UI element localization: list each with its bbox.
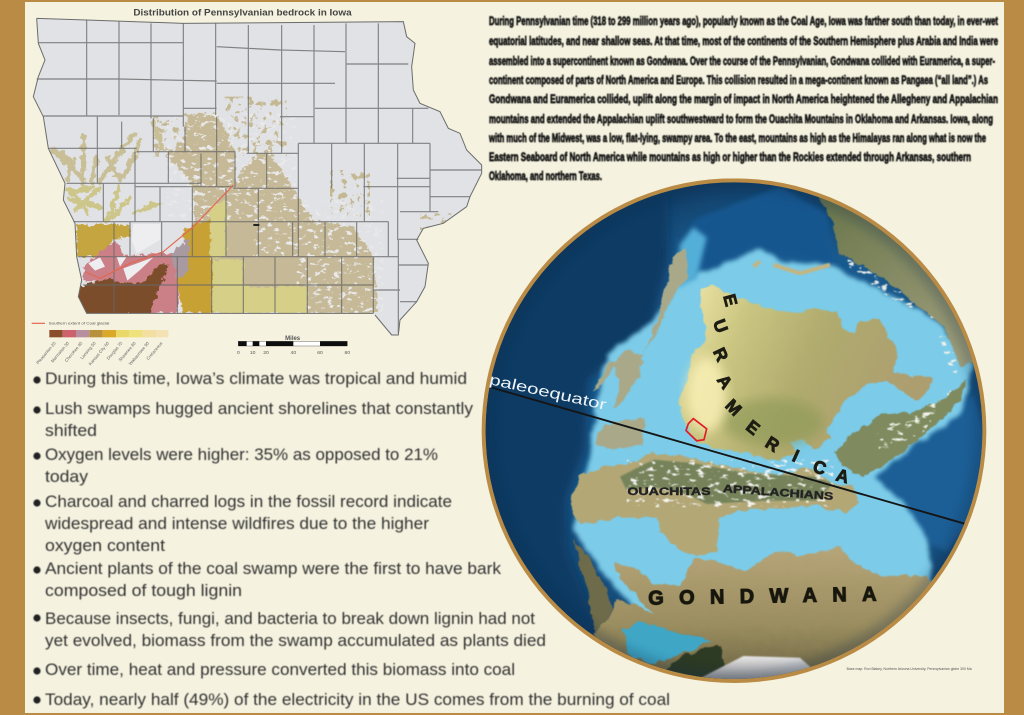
label: Euramerica: E bbox=[742, 416, 764, 439]
eastern mountains bbox=[833, 378, 967, 477]
scale bar: 40 bbox=[291, 350, 296, 356]
bullet list: shifted bbox=[45, 422, 97, 440]
Gondwana bbox=[592, 545, 931, 672]
white flecks over tan bbox=[167, 113, 383, 315]
globe edge shading bbox=[486, 182, 982, 679]
bullet list: Lush swamps hugged ancient shorelines that constantly bbox=[45, 400, 474, 418]
label: Euramerica: R bbox=[709, 344, 732, 365]
label: Euramerica: U bbox=[709, 316, 732, 335]
scale bar: 20 bbox=[263, 350, 269, 356]
globe rim bbox=[482, 178, 986, 683]
scale bar: 60 bbox=[317, 350, 323, 356]
bullet list bbox=[33, 370, 670, 709]
bullet list: oxygen content bbox=[45, 537, 165, 555]
bullet list: yet evolved, biomass from the swamp accumulated as plants died bbox=[45, 632, 546, 650]
white gaps in southwest bbox=[88, 224, 160, 281]
label: Euramerica: I bbox=[789, 446, 802, 466]
label: Euramerica: R bbox=[762, 432, 783, 456]
southern inner sea bbox=[623, 622, 713, 665]
label: Ouachitas: OUACHITAS bbox=[627, 487, 711, 498]
bullet list: Oxygen levels were higher: 35% as opposed to 21% bbox=[45, 446, 438, 464]
yellow-green bedrock bbox=[210, 200, 307, 313]
shallow seas bbox=[573, 249, 973, 620]
northeast land bbox=[781, 187, 973, 368]
western island arc bbox=[593, 248, 687, 449]
scale bar: Miles bbox=[285, 336, 301, 342]
sparse northern and eastern outcrops bbox=[153, 97, 453, 230]
text block: Pennsylvanian overview: Oklahoma, and northern Texas. bbox=[489, 169, 602, 183]
bullet list: During this time, Iowa’s climate was tropical and humid bbox=[45, 370, 467, 388]
solid tan bedrock bbox=[167, 113, 378, 313]
map credit: Base map: Ron Blakey, Northern Arizona University, Pennsylvanian globe 300 Ma bbox=[847, 667, 973, 671]
dark yellow bedrock bbox=[175, 220, 213, 313]
scale bar: 80 bbox=[345, 350, 350, 356]
western dendritic valleys bbox=[53, 122, 163, 220]
bullet list: widespread and intense wildfires due to the higher bbox=[44, 515, 430, 533]
legend: Wabaunsee 90 bbox=[128, 340, 150, 366]
legend: Pleasanton 20 bbox=[35, 340, 57, 365]
bullet list: Because insects, fungi, and bacteria to break down lignin had not bbox=[45, 610, 535, 628]
bullet list: today bbox=[45, 468, 89, 486]
label: paleoequator: paleoequator bbox=[488, 371, 608, 414]
map: Pennsylvanian bedrock in Iowa bbox=[32, 8, 482, 366]
bedrock regions bbox=[53, 97, 453, 315]
scale bar: 10 bbox=[250, 350, 256, 356]
coal extent line bbox=[85, 185, 233, 278]
pink and mauve bedrock bbox=[83, 242, 178, 313]
label: Appalachians: APPALACHIANS bbox=[722, 484, 834, 503]
globe: Pennsylvanian paleogeography bbox=[482, 178, 986, 683]
scale bar: 0 bbox=[237, 350, 240, 356]
label: Gondwana: GONDWANA bbox=[648, 583, 877, 610]
legend: Lansing 50 bbox=[79, 340, 97, 360]
legend: Douglas 70 bbox=[106, 340, 124, 361]
Iowa outline and counties bbox=[33, 18, 482, 335]
legend bbox=[32, 322, 168, 366]
legend: Cherokee 40 bbox=[64, 340, 84, 363]
bullet list: Ancient plants of the coal swamp were the first to have bark bbox=[45, 560, 502, 578]
Ouachita-Appalachian land bbox=[570, 453, 860, 555]
oceans bbox=[480, 176, 1000, 709]
label: Euramerica: C bbox=[810, 456, 829, 479]
legend: Shawnee 80 bbox=[117, 340, 137, 362]
bullet list: Over time, heat and pressure converted this biomass into coal bbox=[45, 661, 515, 679]
label: Euramerica bbox=[709, 292, 851, 487]
bullet list: composed of tough lignin bbox=[45, 582, 242, 600]
legend: Kansas City 60 bbox=[88, 340, 110, 366]
label: Euramerica: E bbox=[719, 292, 741, 309]
label: Euramerica: A bbox=[834, 464, 851, 487]
bullet markers bbox=[33, 376, 41, 704]
legend: Cretaceous bbox=[145, 341, 163, 361]
map title: Distribution of Pennsylvanian bedrock in Iowa bbox=[133, 8, 353, 18]
scale bar bbox=[237, 336, 350, 356]
legend: Southern extent of Coal glacial bbox=[49, 322, 110, 326]
label: Euramerica: A bbox=[713, 371, 737, 393]
county lines bbox=[37, 20, 482, 333]
Antarctica ice bbox=[666, 644, 726, 678]
Iowa locator bbox=[686, 419, 707, 441]
bullet list: Charcoal and charred logs in the fossil record indicate bbox=[45, 493, 452, 511]
text block: Pennsylvanian overview bbox=[488, 14, 998, 183]
label: Euramerica: M bbox=[721, 395, 746, 420]
Euramerica bbox=[678, 285, 932, 460]
legend: Marmaton 30 bbox=[50, 340, 70, 364]
bullet list: Today, nearly half (49%) of the electricity in the US comes from the burning of coal bbox=[45, 691, 670, 709]
brown bedrock bbox=[75, 263, 168, 315]
paleoequator line bbox=[490, 387, 965, 524]
